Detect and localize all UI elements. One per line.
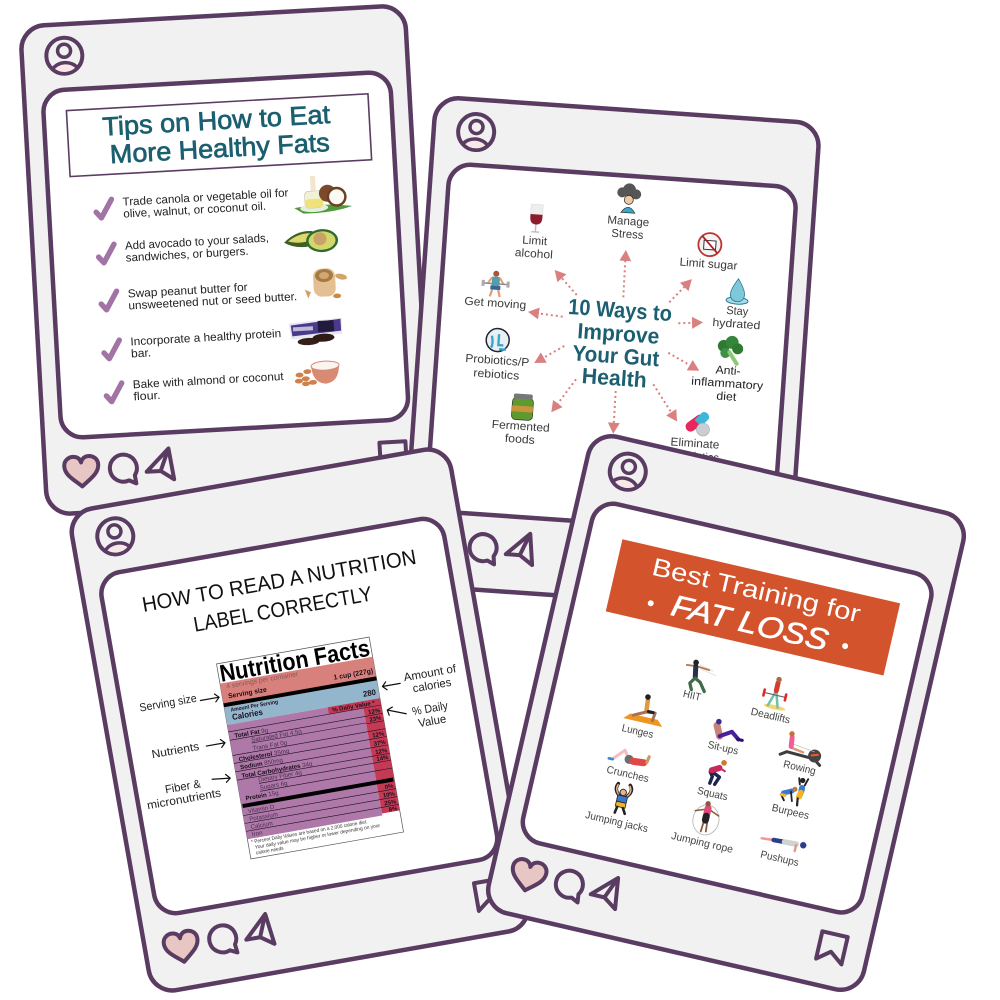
callout: fiber and micronutrients — [144, 773, 234, 812]
item: stay hydrated — [712, 277, 764, 332]
label daily value column — [368, 708, 399, 814]
label serving rows — [226, 658, 379, 731]
label daily value column: 12% — [368, 708, 381, 716]
item: fermented foods: Fermented — [491, 419, 550, 435]
item: manage stress: Manage — [607, 214, 650, 229]
exercise: jumping rope — [670, 795, 742, 856]
label serving rows: 4 servings per container — [226, 671, 299, 691]
label daily value column: 8% — [388, 806, 399, 814]
icon: profile avatar — [45, 37, 83, 75]
tip 3 — [100, 279, 298, 314]
exercise: jumping jacks — [584, 777, 657, 835]
item: anti-inflammatory diet: Anti- — [715, 364, 741, 378]
exercise: squats — [696, 756, 736, 803]
label daily value column: 37% — [373, 740, 387, 748]
callout: percent daily value: % Daily — [411, 700, 449, 718]
item: limit alcohol: Limit — [522, 235, 548, 248]
exercise: crunches: Crunches — [605, 764, 650, 785]
item: fermented foods: foods — [504, 433, 535, 447]
label footnote: * Percent Daily Values are based on a 2,000 calorie diet. — [251, 819, 368, 846]
icon: profile avatar — [606, 450, 649, 493]
central title: Improve — [577, 318, 660, 349]
title banner — [606, 539, 900, 675]
label nutrient rows: Cholesterol 35mg — [238, 748, 290, 763]
icon: heart — [423, 529, 459, 562]
item: anti-inflammatory diet — [690, 333, 767, 406]
label daily value column: 0% — [384, 784, 395, 791]
exercise: HIIT — [679, 658, 719, 706]
label serving rows: Amount Per Serving — [230, 699, 279, 714]
image: peanut butter — [304, 267, 349, 300]
icon: bookmark — [816, 931, 848, 964]
icon: send — [145, 448, 174, 481]
tip 2 — [98, 233, 270, 266]
label nutrient rows: Iron — [251, 829, 264, 838]
image: protein bar — [288, 318, 343, 346]
label footnote: calorie needs — [255, 846, 285, 856]
label serving rows: Serving size — [228, 687, 268, 700]
item: anti-inflammatory diet: diet — [716, 390, 738, 404]
card: fat loss training — [483, 431, 969, 995]
item: manage stress: Stress — [611, 228, 644, 242]
item: probiotics and prebiotics: Probiotics/P — [465, 353, 530, 369]
label heading: Nutrition Facts — [218, 635, 372, 688]
item: anti-inflammatory diet: inflammatory — [691, 376, 764, 393]
card: nutrition label — [68, 446, 532, 994]
tip 5 — [106, 371, 285, 405]
title: Tips on How to Eat — [102, 99, 332, 142]
central title: Health — [581, 363, 648, 393]
exercise: HIIT: HIIT — [682, 688, 703, 704]
icon: bookmark — [474, 879, 504, 911]
icon: send — [243, 913, 274, 949]
label nutrient rows: Total Fat 9g — [234, 727, 269, 740]
exercise: sit-ups — [707, 718, 746, 758]
exercise: jumping rope: Jumping rope — [670, 830, 734, 856]
title banner: FAT LOSS — [668, 589, 831, 658]
label serving rows: 280 — [362, 688, 377, 699]
callout: fiber and micronutrients: micronutrients — [146, 787, 222, 812]
item: stay hydrated: hydrated — [712, 317, 761, 332]
icon: bookmark — [379, 441, 407, 471]
label nutrient rows: Dietary Fiber 4g — [258, 769, 303, 784]
label serving rows: Calories — [231, 707, 264, 722]
exercise: burpees: Burpees — [771, 802, 810, 822]
exercise: sit-ups: Sit-ups — [707, 739, 739, 758]
item: limit sugar — [679, 231, 740, 273]
callout: serving size: Serving size — [139, 693, 198, 715]
callout: percent daily value — [387, 698, 451, 735]
icon: heart — [64, 455, 99, 487]
image: almonds and flour — [294, 360, 340, 387]
callout: amount of calories: Amount of — [403, 663, 458, 684]
callout: serving size — [139, 689, 220, 715]
tip 1: Trade canola or vegetable oil for — [122, 187, 289, 209]
exercise: lunges: Lunges — [621, 722, 654, 741]
label daily value column: 14% — [376, 755, 390, 763]
label nutrient rows: Potassium — [249, 811, 278, 823]
exercise: crunches — [605, 747, 654, 785]
icon: heart — [508, 857, 548, 894]
label daily value column: 23% — [369, 716, 383, 724]
icon: comment — [207, 923, 239, 957]
icon: comment — [469, 533, 498, 564]
central title — [563, 294, 673, 394]
item: eliminate antibiotics: Eliminate — [670, 436, 720, 452]
exercise: deadlifts: Deadlifts — [750, 706, 791, 726]
exercise: deadlifts — [750, 672, 799, 726]
item: probiotics and prebiotics — [464, 326, 532, 383]
tip 4 — [103, 328, 282, 362]
exercise: squats: Squats — [696, 785, 729, 803]
title: LABEL CORRECTLY — [192, 583, 374, 637]
label footnote — [251, 817, 382, 857]
card frame — [20, 5, 432, 515]
callout: nutrients — [151, 736, 226, 761]
item: stay hydrated: Stay — [726, 305, 749, 318]
title banner: Best Training for — [649, 553, 863, 628]
label daily value column: 10% — [383, 791, 396, 799]
item: probiotics and prebiotics: rebiotics — [473, 367, 520, 383]
tip 5: flour. — [133, 390, 161, 403]
label nutrient rows: Trans Fat 0g — [252, 739, 288, 752]
content panel — [98, 515, 501, 917]
nutrition facts label — [216, 635, 404, 859]
title — [102, 99, 333, 170]
label serving rows: % Daily Value * — [332, 700, 376, 714]
label nutrient rows: Sodium 850mg — [240, 757, 284, 771]
exercise: lunges — [620, 690, 669, 743]
item: eliminate antibiotics — [669, 410, 722, 465]
item: eliminate antibiotics: antibiotics — [669, 449, 720, 465]
tip 3: unsweetened nut or seed butter. — [128, 291, 298, 313]
item: manage stress — [606, 182, 652, 242]
item: limit alcohol — [514, 203, 556, 262]
image: avocado — [283, 228, 339, 254]
callout: fiber and micronutrients: Fiber & — [164, 778, 202, 796]
label nutrient rows: Protein 15g — [245, 790, 280, 802]
content panel — [426, 163, 797, 535]
central title: 10 Ways to — [567, 294, 673, 326]
tip 4: Incorporate a healthy protein — [130, 328, 282, 348]
card frame — [402, 97, 820, 611]
item: limit alcohol: alcohol — [514, 247, 553, 262]
title: More Healthy Fats — [109, 127, 330, 169]
callout: nutrients: Nutrients — [151, 741, 200, 761]
icon: profile avatar — [94, 515, 136, 557]
icon: send — [505, 532, 534, 565]
tip 1 — [95, 187, 290, 222]
tip 3: Swap peanut butter for — [127, 282, 248, 301]
title — [140, 546, 423, 645]
title box — [66, 94, 372, 177]
icon: profile avatar — [457, 113, 495, 151]
tip 1: olive, walnut, or coconut oil. — [123, 201, 266, 221]
image: oil and coconut — [292, 174, 352, 214]
label nutrient rows: Total Carbohydrates 34g — [241, 761, 314, 780]
exercise: pushups — [757, 833, 807, 870]
label nutrient rows: Saturated Fat 4.5g — [251, 728, 303, 744]
item: limit sugar: Limit sugar — [679, 257, 738, 273]
dotted arrows radiating from title — [530, 252, 701, 432]
exercise: jumping jacks: Jumping jacks — [584, 809, 649, 835]
content panel — [518, 499, 936, 917]
label nutrient rows — [234, 720, 324, 838]
label nutrient rows: Vitamin D — [247, 804, 275, 815]
exercise: burpees — [771, 773, 817, 822]
tip 2: sandwiches, or burgers. — [125, 246, 249, 265]
card: gut health — [402, 97, 820, 611]
item: get moving — [464, 269, 528, 312]
callout: percent daily value: Value — [417, 713, 447, 730]
label daily value column: 12% — [375, 748, 388, 756]
label daily value column: 12% — [372, 731, 385, 739]
icon: comment — [553, 868, 586, 903]
label nutrient rows: Sugars 6g — [259, 780, 289, 792]
exercise: rowing — [777, 730, 826, 778]
icon: comment — [109, 454, 138, 485]
label footnote: Your daily value may be higher or lower depending on your — [254, 823, 381, 851]
central title: Your Gut — [572, 340, 661, 371]
tip 5: Bake with almond or coconut — [133, 371, 285, 391]
label daily value column: 25% — [384, 799, 397, 807]
exercise: pushups: Pushups — [759, 849, 800, 869]
callout: amount of calories — [381, 663, 460, 700]
content panel — [42, 72, 409, 438]
card frame — [68, 446, 532, 994]
label nutrient rows: Calcium — [250, 820, 273, 831]
tip 4: bar. — [131, 347, 151, 360]
item: fermented foods — [490, 392, 552, 448]
card: healthy fats tips — [20, 5, 432, 515]
icon: bookmark — [738, 555, 766, 584]
callout: amount of calories: calories — [412, 677, 453, 695]
item: get moving: Get moving — [464, 296, 527, 312]
rotated card body — [402, 97, 820, 611]
label serving rows: 1 cup (227g) — [333, 668, 374, 682]
icon: heart — [162, 929, 201, 965]
icon: send — [589, 873, 622, 909]
tip 2: Add avocado to your salads, — [125, 233, 269, 253]
card frame — [483, 431, 969, 995]
exercise: rowing: Rowing — [782, 758, 817, 778]
title: HOW TO READ A NUTRITION — [140, 546, 418, 617]
